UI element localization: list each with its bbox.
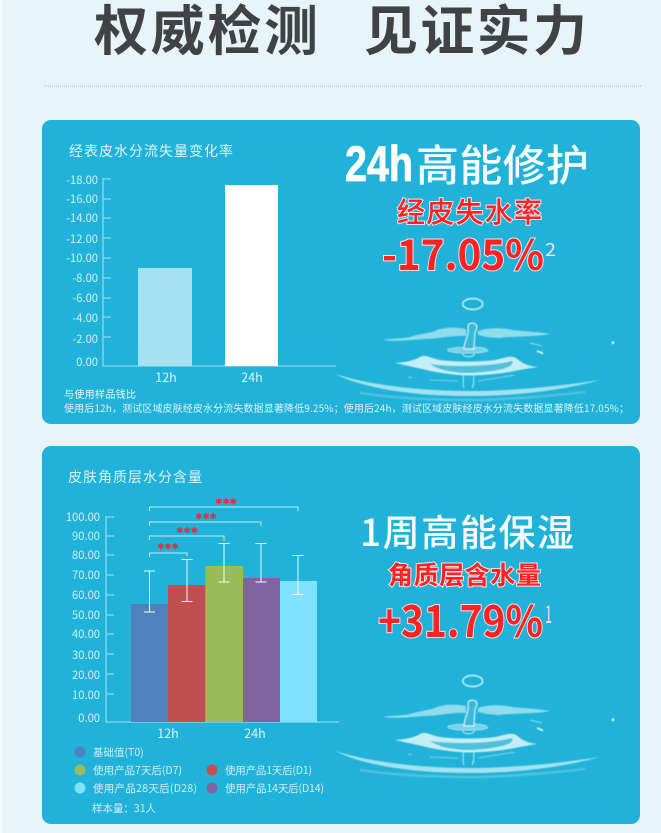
bar chart: water loss change: -2.00: [72, 331, 98, 347]
bar chart: hydration: 30.00: [72, 647, 100, 663]
bar chart: water loss change: [66, 172, 336, 386]
bar chart: water loss change: -8.00: [72, 270, 98, 286]
bar chart: water loss change: -14.00: [66, 210, 98, 226]
headline: 1 week hydration: 1周高能保湿: [360, 503, 574, 557]
stat: -17.05%: -17.05%: [382, 222, 544, 282]
bar chart: hydration: 12h: [157, 723, 179, 742]
legend: 样本量：31人: [92, 801, 156, 816]
bar chart: hydration: 60.00: [72, 587, 100, 603]
bar chart: water loss change: 0.00: [76, 354, 98, 370]
significance stars: ✱✱✱: [195, 512, 217, 522]
bar chart: hydration: [66, 498, 339, 742]
bar chart: hydration: 80.00: [72, 547, 100, 563]
headline: 24h repair: 24h: [345, 136, 413, 192]
bar chart: hydration: 90.00: [72, 528, 100, 544]
bar chart: hydration: 20.00: [72, 667, 100, 683]
bar chart: water loss change: 12h: [155, 367, 177, 386]
bar chart: water loss change: -6.00: [72, 290, 98, 306]
footnote: [64, 386, 629, 415]
significance stars: ✱✱✱: [215, 498, 237, 508]
stat: -17.05%: 2: [545, 236, 556, 262]
stat: +31.79%: +31.79%: [378, 588, 543, 650]
bar chart: water loss change: -18.00: [66, 172, 98, 188]
error bars: [144, 544, 304, 612]
bar chart: hydration: 24h: [244, 723, 266, 742]
bar chart: water loss change: -4.00: [72, 310, 98, 326]
bar chart: water loss change: -10.00: [66, 250, 98, 266]
significance stars: ✱✱✱: [157, 542, 179, 552]
bar chart: water loss change: -16.00: [66, 191, 98, 207]
panel: transepidermal water loss: [42, 120, 640, 424]
bar chart: water loss change: 24h: [241, 367, 263, 386]
footnote: 与使用样品钱比: [64, 386, 136, 401]
title: [94, 0, 587, 66]
stat: +31.79%: 1: [545, 595, 552, 630]
water splash illustration: [335, 676, 614, 777]
bar chart: hydration: 100.00: [66, 509, 100, 525]
subheading: 角质层含水量: [388, 556, 541, 592]
chart heading: 经表皮水分流失量变化率: [69, 141, 233, 161]
water splash illustration: [335, 298, 614, 400]
bar chart: hydration: 10.00: [72, 687, 100, 703]
legend: [74, 745, 324, 816]
significance stars: ✱✱✱: [176, 526, 198, 536]
chart heading: 皮肤角质层水分含量: [68, 467, 202, 487]
bar chart: water loss change: -12.00: [66, 231, 98, 247]
bar chart: hydration: 40.00: [72, 626, 100, 642]
footnote: 使用后12h，测试区域皮肤经皮水分流失数据显著降低9.25%；使用后24h，测试区域皮肤经皮水分流失数据显著降低17.05%；: [64, 400, 629, 415]
legend: 基础值(T0): [93, 745, 144, 760]
bar chart: hydration: 0.00: [78, 710, 100, 726]
subheading: 经皮失水率: [397, 191, 542, 231]
significance stars: [157, 498, 237, 552]
headline: 24h repair: 高能修护: [416, 132, 589, 194]
legend: 使用产品14天后(D14): [225, 781, 324, 796]
legend: 使用产品28天后(D28): [93, 781, 197, 796]
panel: stratum corneum hydration: [42, 446, 640, 824]
legend: 使用产品7天后(D7): [93, 763, 182, 778]
bar chart: hydration: 70.00: [72, 567, 100, 583]
bar chart: hydration: 50.00: [72, 607, 100, 623]
legend: 使用产品1天后(D1): [225, 763, 312, 778]
significance brackets: [150, 507, 298, 557]
